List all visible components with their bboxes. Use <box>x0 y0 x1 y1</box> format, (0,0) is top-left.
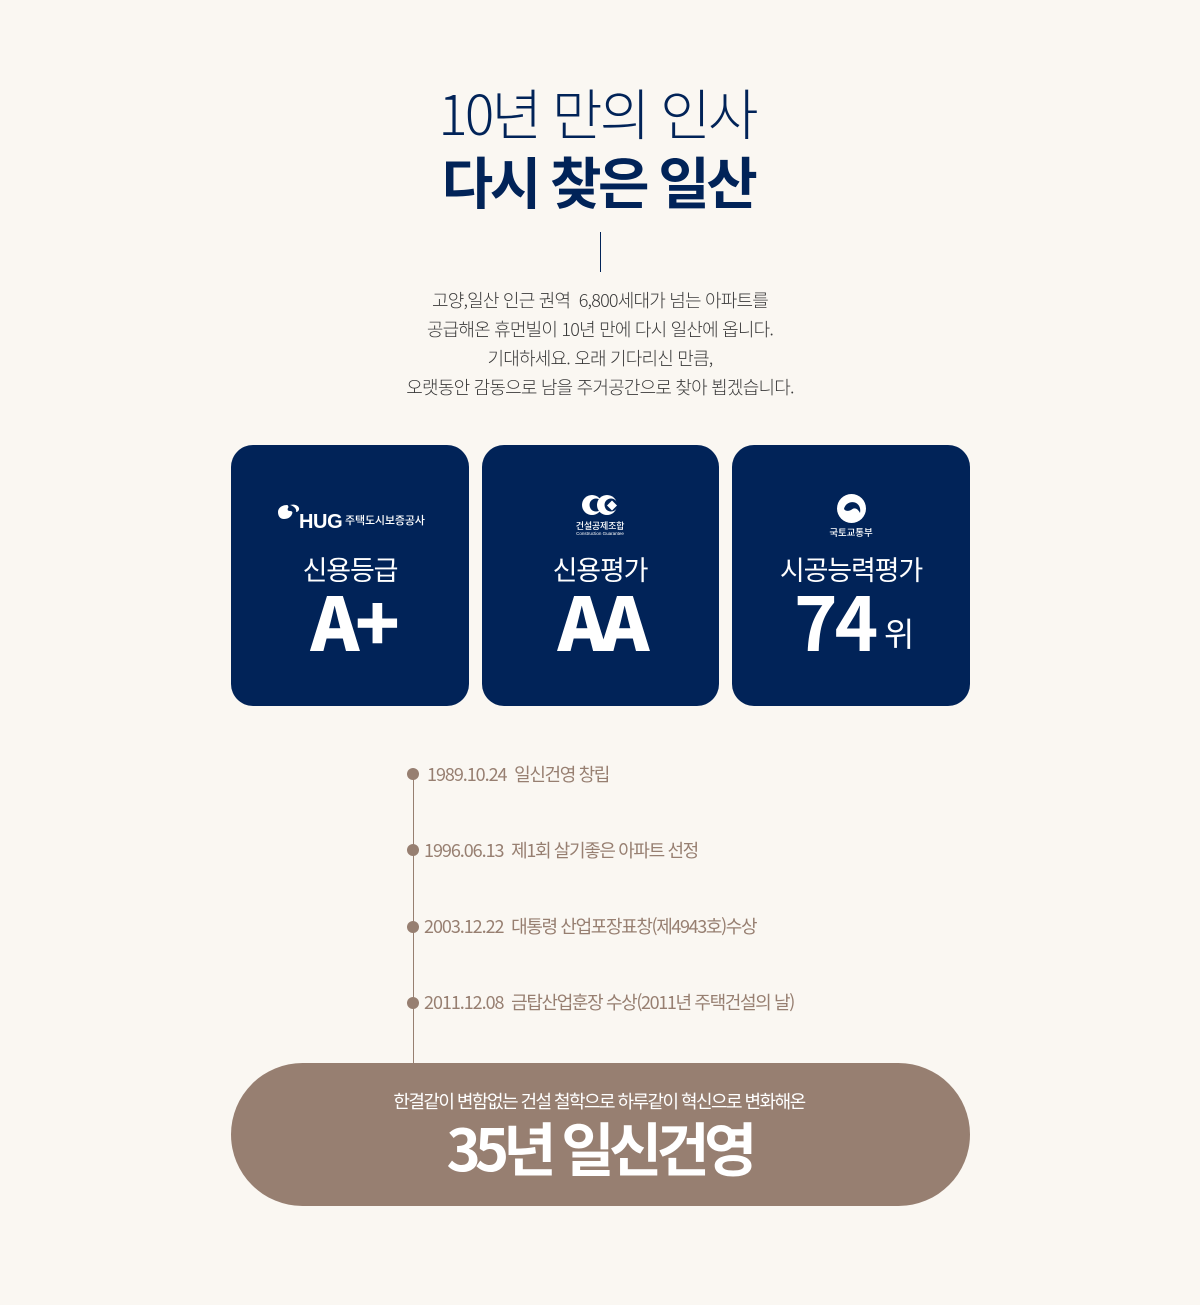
heading line 1: 10년 만의 인사 <box>438 71 756 151</box>
timeline <box>407 761 794 1063</box>
icon: HUG logo: 주택도시보증공사 <box>345 512 425 528</box>
intro line 3: 기대하세요. 오래 기다리신 만큼, <box>487 345 713 371</box>
label: 신용평가 <box>553 549 647 588</box>
panel: CG credit rating <box>482 445 719 706</box>
icon: HUG logo <box>278 504 425 533</box>
icon: ministry logo <box>829 494 873 539</box>
rating value: AA <box>558 566 643 673</box>
heading line 2: 다시 찾은 일산 <box>442 140 754 221</box>
intro line 1: 고양,일산 인근 권역 6,800세대가 넘는 아파트를 <box>432 287 768 313</box>
vertical divider <box>600 232 601 272</box>
icon: HUG logo: HUG <box>299 511 342 533</box>
panel: HUG credit rating <box>231 445 469 706</box>
banner subtitle: 한결같이 변함없는 건설 철학으로 하루같이 혁신으로 변화해온 <box>393 1088 805 1114</box>
icon: CG logo: 건설공제조합 <box>576 519 624 532</box>
rank value <box>794 566 914 673</box>
icon: CG logo <box>576 495 624 536</box>
icon: ministry logo: 국토교통부 <box>829 525 873 539</box>
intro text <box>406 287 794 400</box>
event 2011: 2011.12.08 금탑산업훈장 수상(2011년 주택건설의 날) <box>424 989 794 1015</box>
heading <box>438 71 757 221</box>
intro line 2: 공급해온 휴먼빌이 10년 만에 다시 일산에 옵니다. <box>427 316 773 342</box>
intro line 4: 오랫동안 감동으로 남을 주거공간으로 찾아 뵙겠습니다. <box>406 374 794 400</box>
timeline line <box>413 774 414 1064</box>
label: 시공능력평가 <box>780 549 922 588</box>
icon: CG logo: Construction Guarantee <box>576 531 624 536</box>
label: 신용등급 <box>303 549 397 588</box>
event 2003: 2003.12.22 대통령 산업포장표창(제4943호)수상 <box>424 913 756 939</box>
rating value: A+ <box>311 566 395 673</box>
closing banner <box>231 1063 970 1206</box>
event 1996: 1996.06.13 제1회 살기좋은 아파트 선정 <box>424 837 698 863</box>
event 1989: 1989.10.24 일신건영 창립 <box>427 761 609 787</box>
banner title: 35년 일신건영 <box>446 1104 752 1188</box>
rank value: 74 <box>794 566 875 673</box>
rank value: 위 <box>884 608 914 656</box>
panel: construction capability ranking <box>732 445 970 706</box>
